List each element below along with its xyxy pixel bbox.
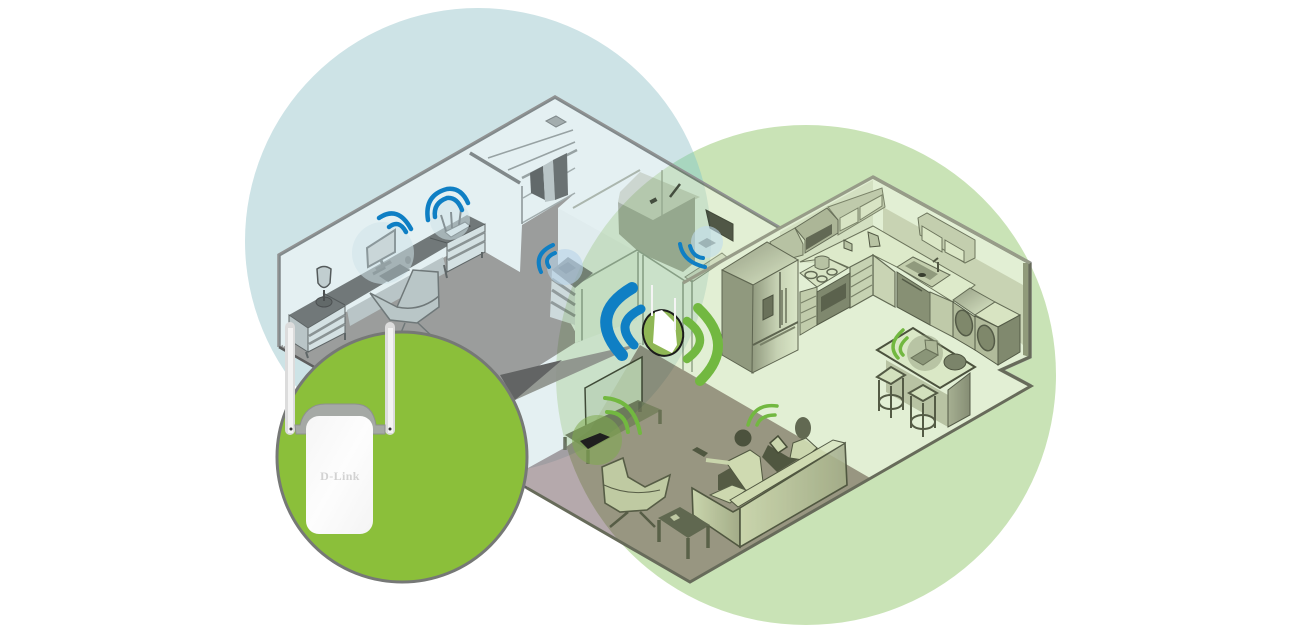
antenna left [285,322,295,435]
pale wall below signal cone [500,320,640,468]
coverage circle: router (blue) [245,8,711,474]
house base floor [279,97,1031,582]
office chair [370,270,439,340]
coffee table [658,507,710,559]
lamp [316,266,332,307]
router on desk [441,209,470,237]
wall end post [1023,263,1030,357]
kitchen counters [800,226,975,335]
device brand: D-Link [320,469,360,483]
kitchen back wall [770,180,1030,357]
washer and dryer [953,288,1020,365]
dresser [550,257,593,325]
device body [306,416,373,534]
wall: office back wall [283,153,520,347]
monitor and keyboard [367,230,411,282]
bathroom counter [685,253,728,282]
office floor edge [279,347,527,488]
partition wall with extender [500,208,692,468]
dishwasher and cabinet [897,272,953,337]
wifi arcs: blue, router and office devices [379,189,705,272]
office desk [289,215,485,358]
wifi arcs: green, extender [687,308,718,381]
house bottom outline [527,263,1031,582]
wifi arcs: green, client devices [605,330,907,433]
kitchen backsplash [883,207,1023,345]
signal bubbles [352,200,943,465]
floor: office [279,193,640,450]
refrigerator [722,242,798,373]
laptop [911,340,938,365]
stove [800,256,850,325]
antenna right [385,322,395,435]
towel rack [706,210,733,241]
bathroom [559,158,780,283]
tint overlay: blue coverage on house [279,97,711,468]
person: man with remote [692,430,763,492]
kitchen island [877,328,975,437]
antenna bracket [295,404,385,434]
people on sofa [692,417,817,492]
sofa [692,440,847,547]
person: woman with tablet [762,417,817,472]
closet [470,97,660,224]
floor: living room [279,345,870,582]
living room chair [602,458,670,527]
kitchen upper cabinets [770,188,975,263]
microwave [795,208,838,253]
shower wall [618,197,695,272]
wall mounted soap and hook [649,184,680,204]
house walls outline [279,97,1031,386]
fruit bowl [944,354,966,370]
kitchen wall outline [683,177,1030,283]
tint overlay: living room floor shade [566,345,868,580]
floor plan [279,97,1031,582]
TV partition and bench [565,357,662,464]
magnifier circle [277,332,527,582]
tint overlay: green coverage on house [556,164,1028,580]
bar stools [877,367,937,437]
extender location ring [638,285,688,360]
extender device close-up [285,322,395,534]
wifi arcs: blue, extender [606,288,641,355]
coverage overlap of both circles [673,152,703,181]
TV box device [580,433,610,449]
signal cone from magnifier to extender [500,343,642,400]
coverage circle: extender (green) [556,125,1056,625]
